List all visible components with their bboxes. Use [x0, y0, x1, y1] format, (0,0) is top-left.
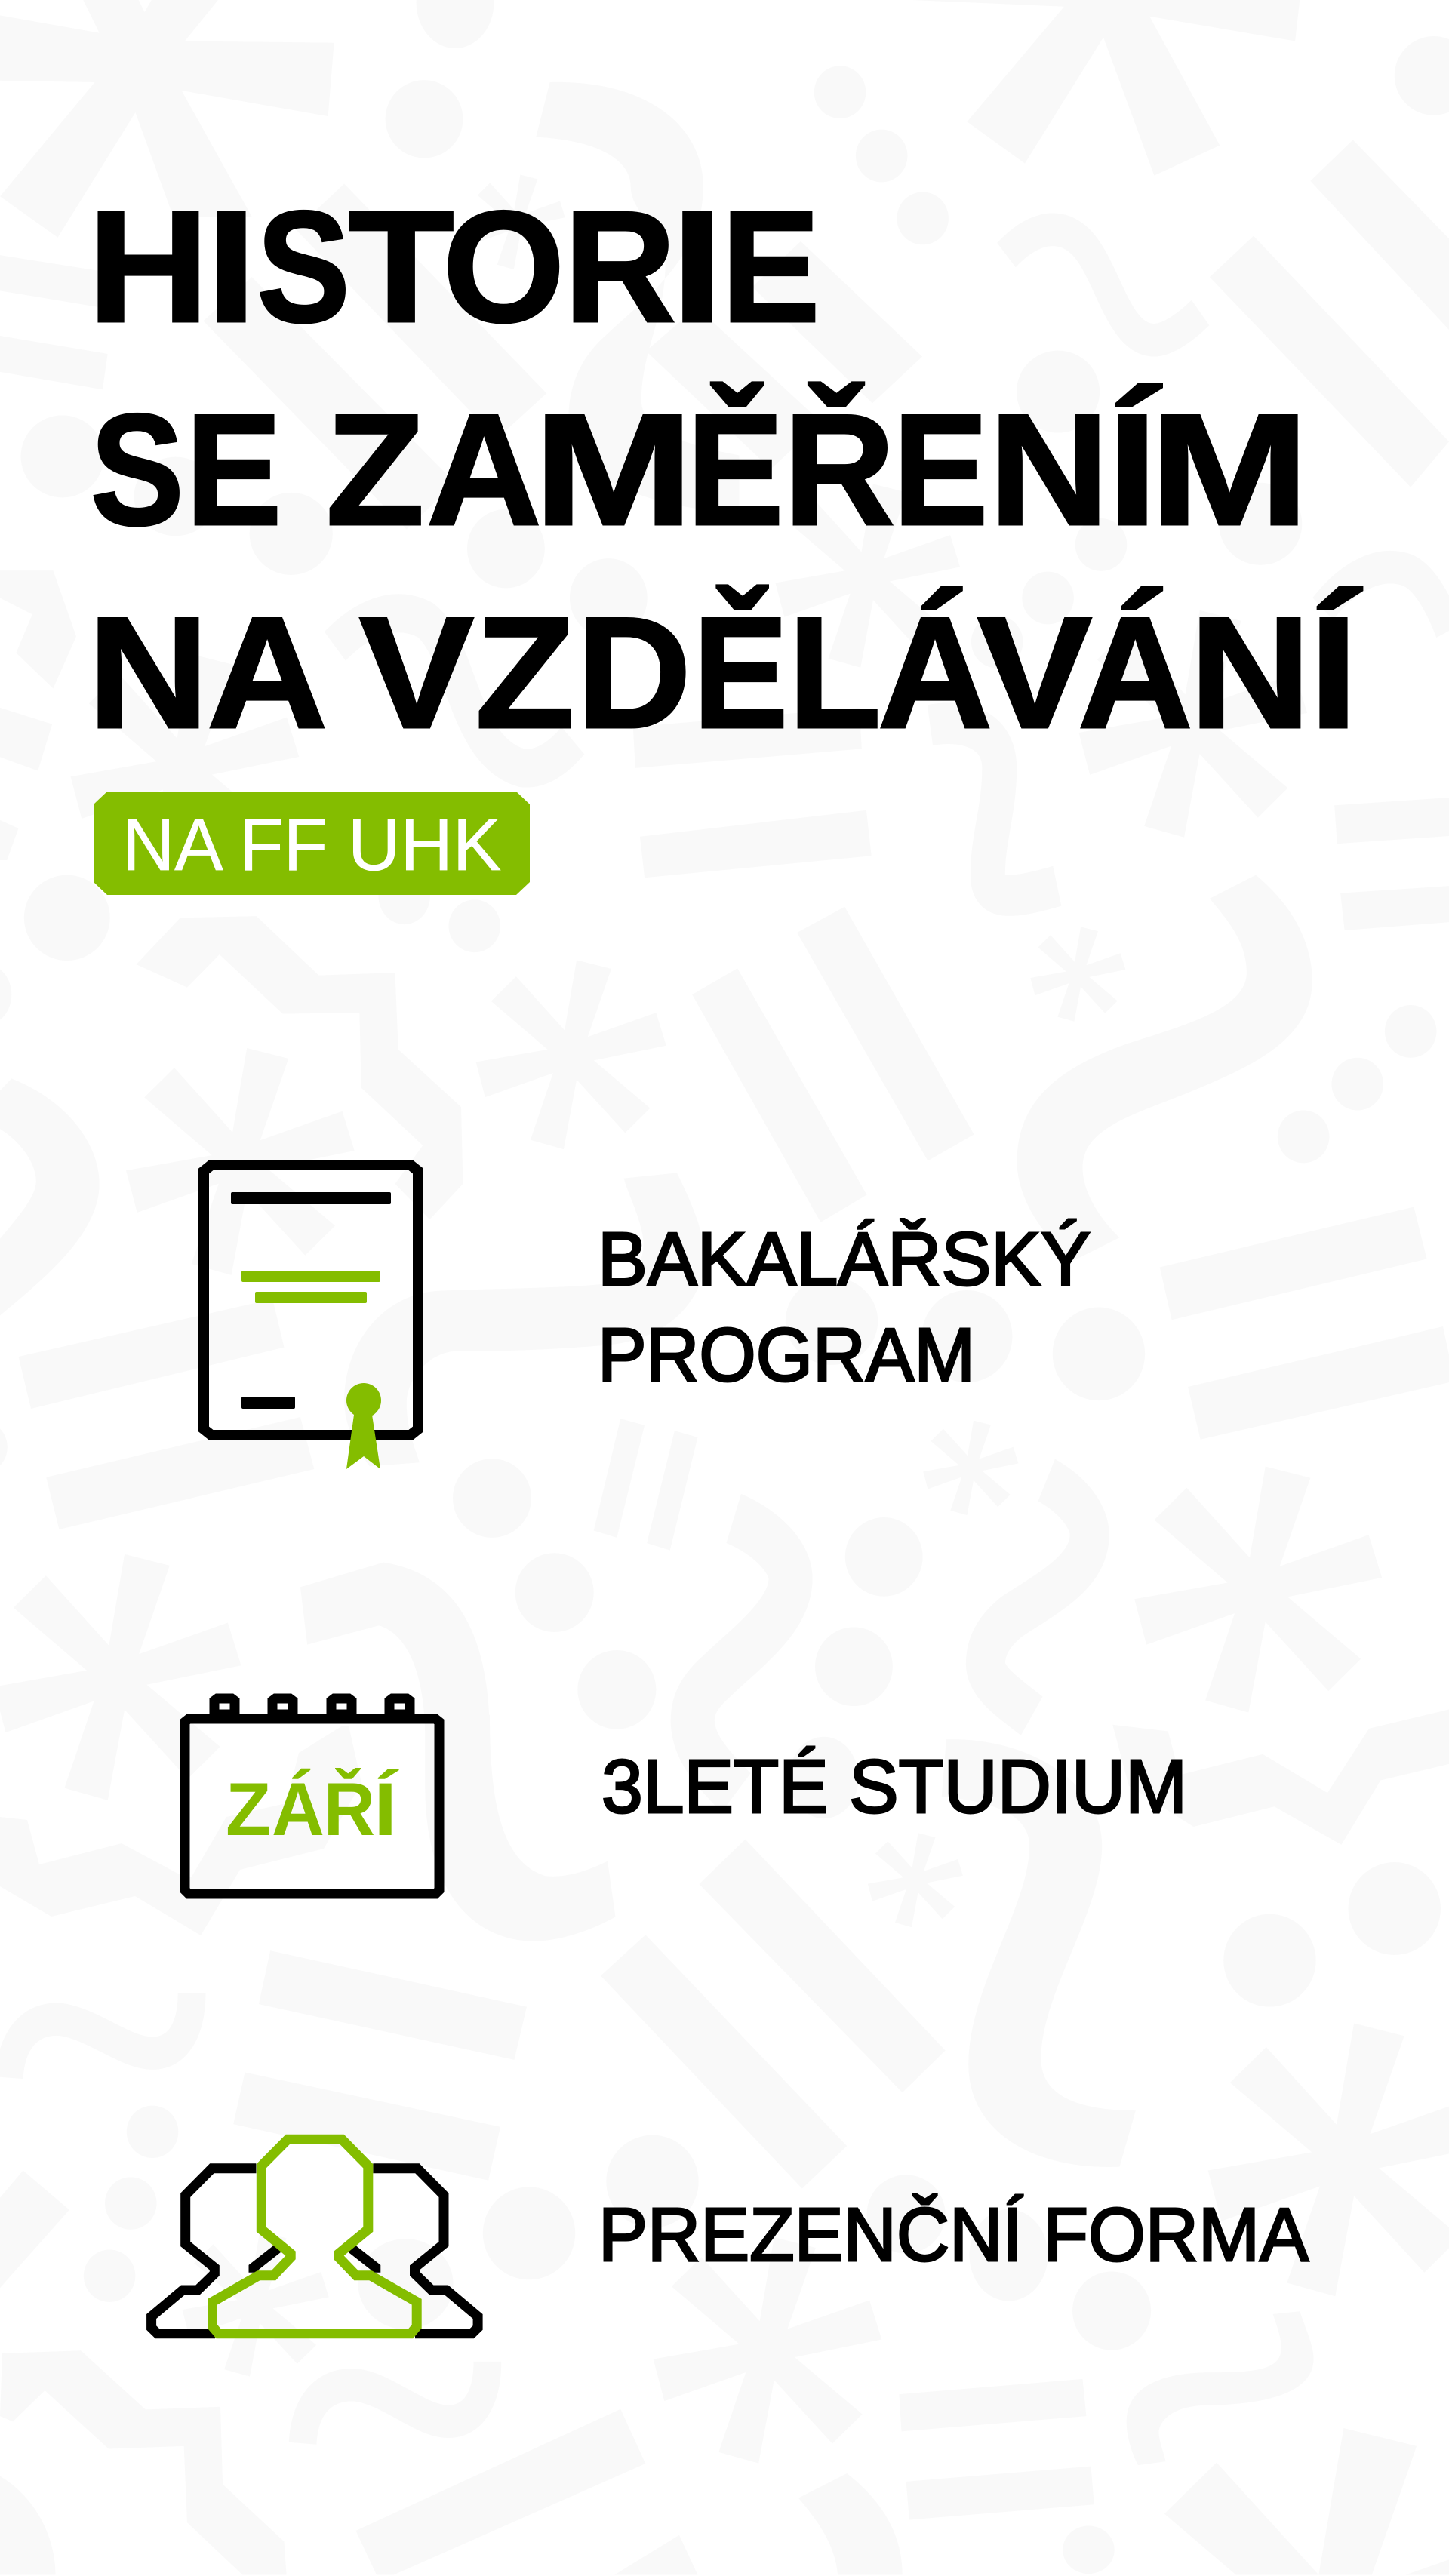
icon: calendar: Í: [374, 1767, 399, 1851]
title: [88, 178, 1362, 761]
title: E: [186, 381, 281, 558]
title: N: [88, 584, 209, 761]
title: Z: [475, 584, 574, 761]
title: I: [206, 178, 257, 355]
title: M: [534, 381, 694, 558]
title: V: [977, 584, 1092, 761]
icon: three people: [152, 2139, 478, 2334]
title: Í: [1309, 584, 1362, 761]
title: N: [989, 381, 1109, 558]
label: Prezenční forma: PREZENČNÍ FORMA: [598, 2193, 1309, 2277]
title: Z: [326, 381, 424, 558]
title: M: [1149, 381, 1309, 558]
title: Ř: [783, 381, 895, 558]
title: H: [88, 178, 209, 355]
title: R: [564, 178, 676, 355]
title: E: [721, 178, 820, 355]
title: Á: [1078, 584, 1192, 761]
title: Ě: [687, 381, 783, 558]
title: L: [789, 584, 881, 761]
badge: NA FF UHK: [94, 792, 530, 895]
title: Ě: [693, 584, 788, 761]
label: Bakalářský program: [598, 1217, 1091, 1397]
title: D: [577, 584, 691, 761]
icon: calendar: Ř: [324, 1767, 375, 1851]
title: N: [1189, 584, 1311, 761]
title: O: [442, 178, 565, 355]
title: S: [257, 178, 350, 355]
title: I: [671, 178, 723, 355]
icon: calendar: [185, 1698, 439, 1894]
title: T: [349, 178, 454, 355]
title: V: [359, 584, 474, 761]
title: E: [893, 381, 988, 558]
badge: NA FF UHK: NA FF UHK: [122, 804, 501, 886]
title: Í: [1107, 381, 1161, 558]
label: Bakalářský program: PROGRAM: [598, 1313, 975, 1397]
title: A: [426, 381, 542, 558]
icon: calendar: Á: [272, 1767, 325, 1851]
title: A: [207, 584, 324, 761]
label: 3leté studium: 3LETÉ STUDIUM: [601, 1744, 1187, 1829]
label: Bakalářský program: BAKALÁŘSKÝ: [598, 1217, 1091, 1302]
title: Á: [878, 584, 992, 761]
title: S: [91, 381, 184, 558]
icon: calendar: Z: [226, 1767, 271, 1851]
icon: certificate: [204, 1165, 418, 1469]
